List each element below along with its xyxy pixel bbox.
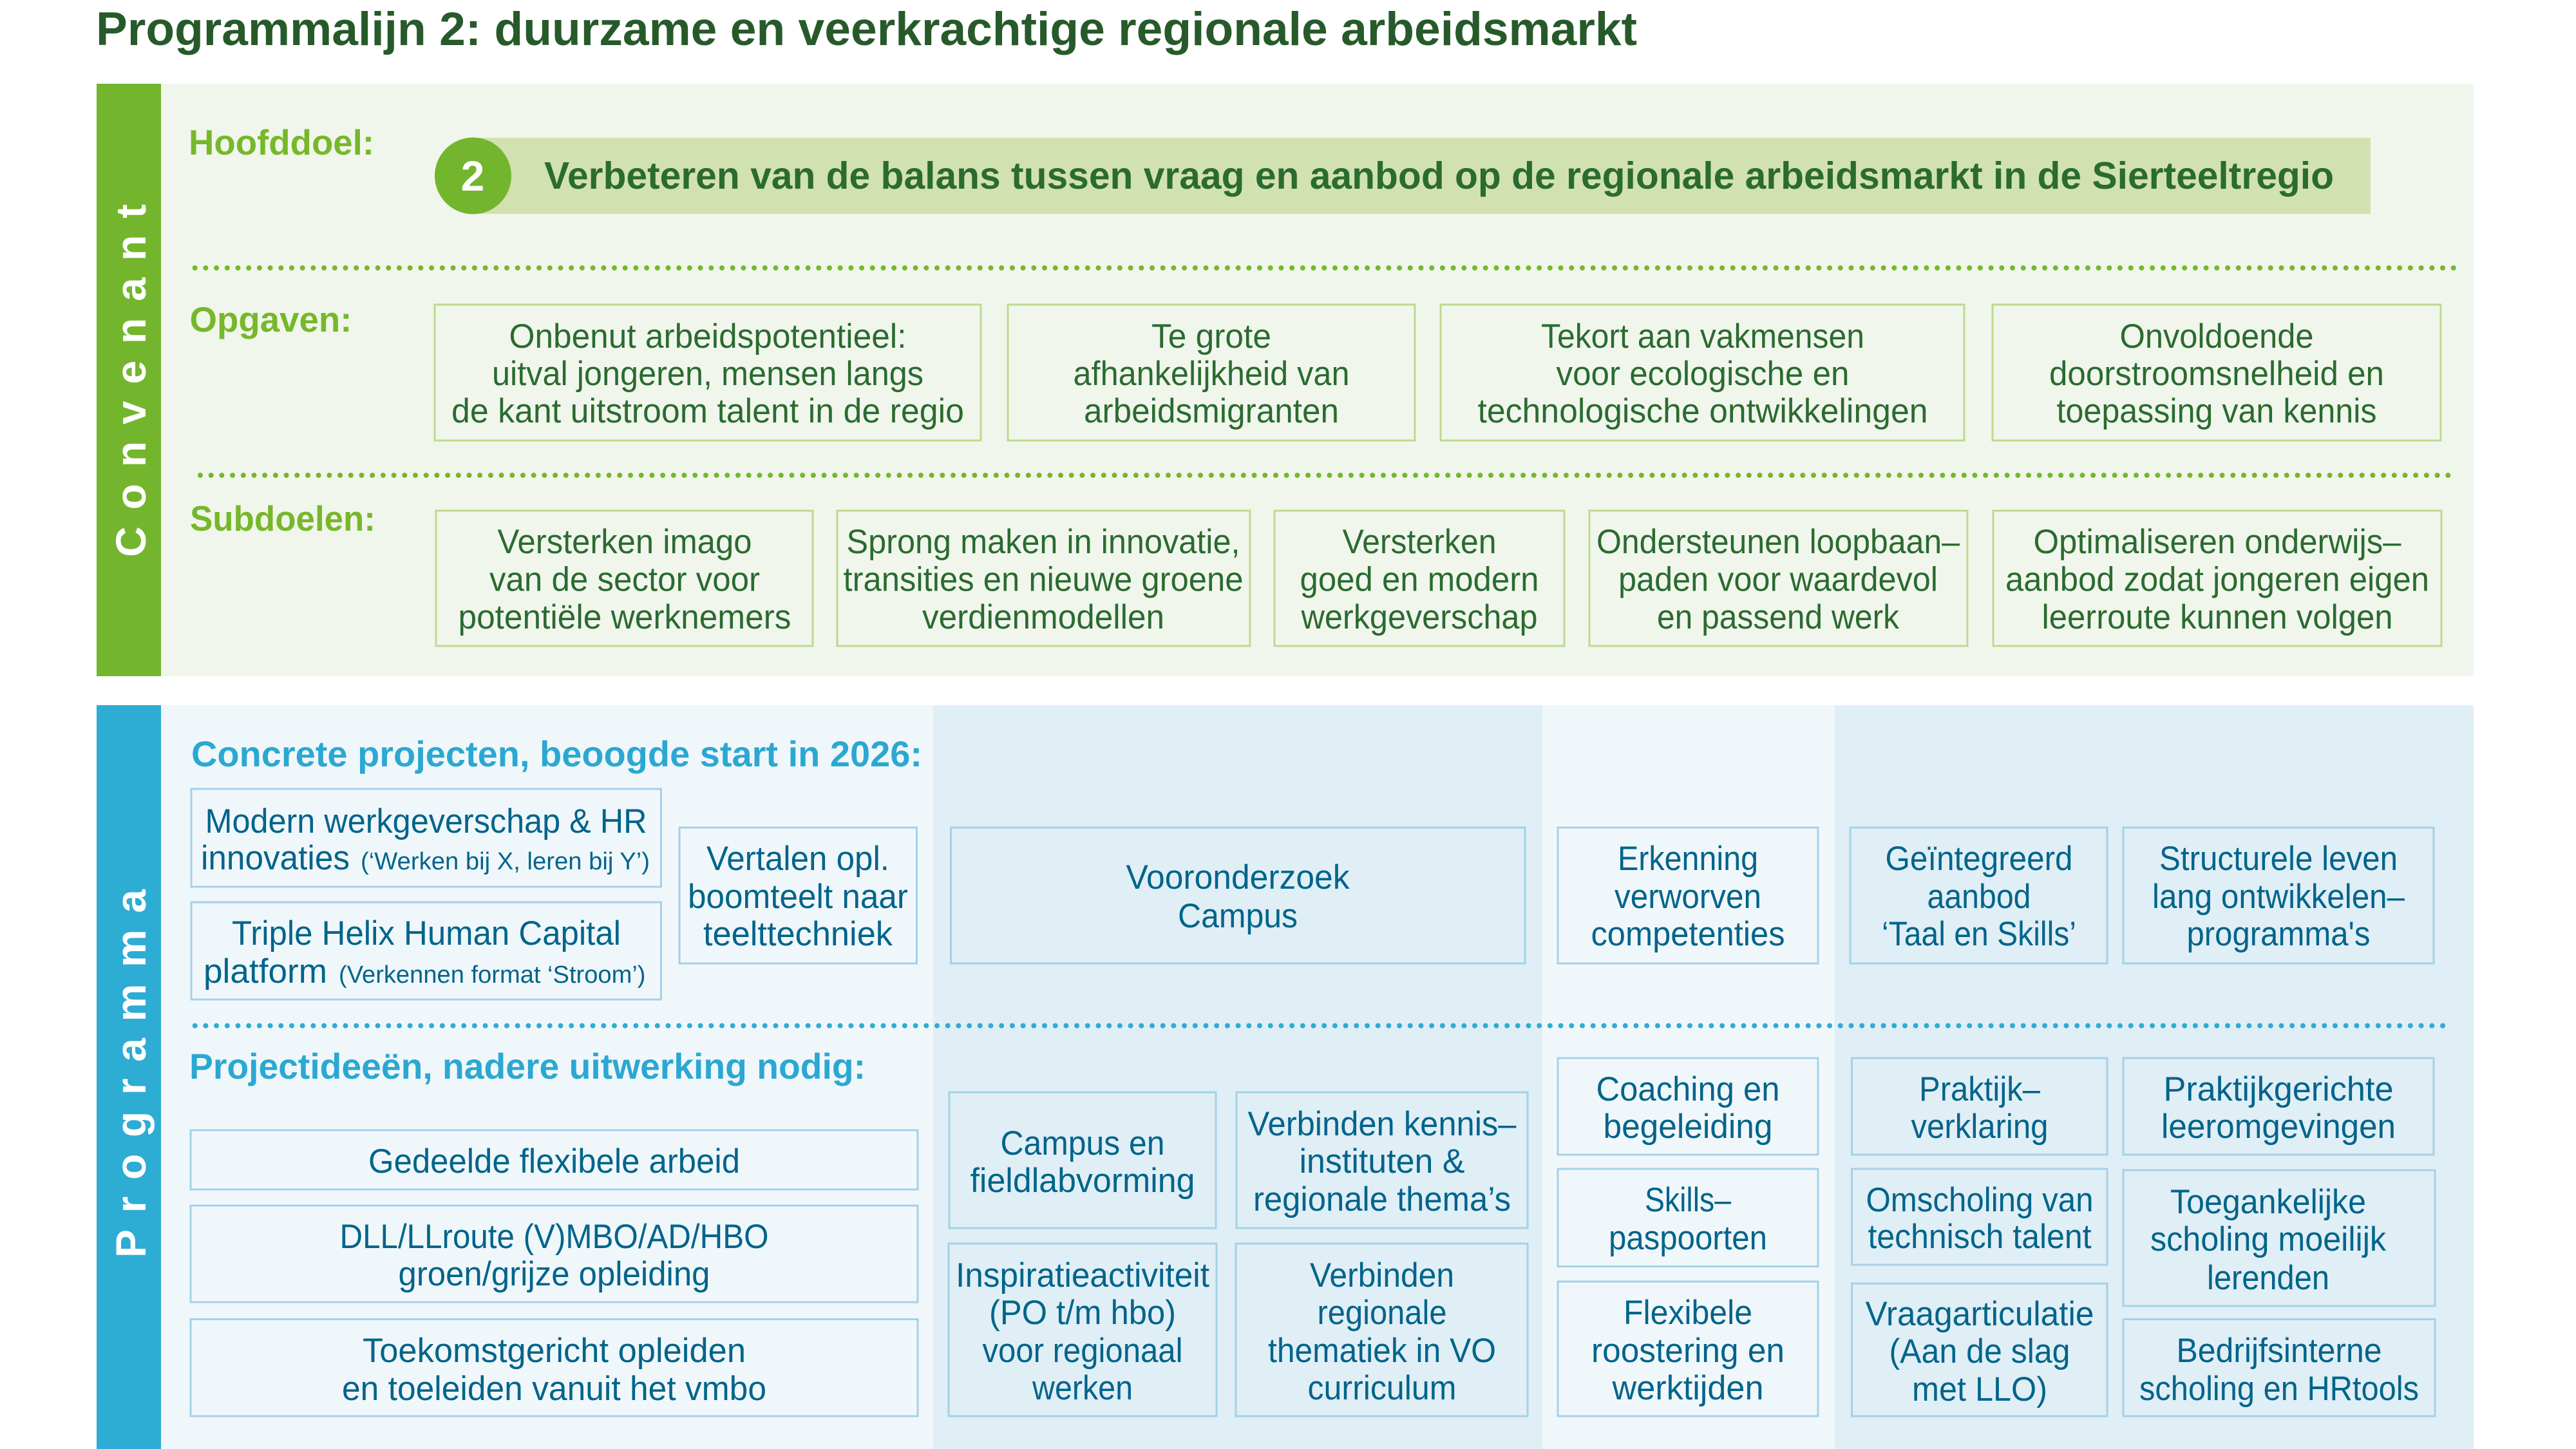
project: modern werkgeverschap: (‘Werken bij X, leren bij Y’) bbox=[361, 848, 650, 875]
project: leven lang ontwikkelen: Structurele leven bbox=[2159, 840, 2398, 878]
project: erkenning competenties: Erkenning bbox=[1618, 840, 1758, 878]
subdoel box 1: van de sector voor bbox=[489, 560, 760, 599]
idea: verbinden regionale thematiek: Verbinden bbox=[1310, 1256, 1454, 1294]
opgave box 4: toepassing van kennis bbox=[2057, 392, 2376, 430]
label: Subdoelen: Subdoelen: bbox=[190, 498, 375, 538]
project: erkenning competenties bbox=[1558, 828, 1818, 963]
idea: praktijkverklaring bbox=[1852, 1058, 2107, 1155]
project: vertalen opleiding bbox=[679, 828, 917, 963]
idea: toegankelijke scholing bbox=[2123, 1170, 2435, 1306]
project: leven lang ontwikkelen: programma's bbox=[2187, 915, 2370, 953]
idea: toegankelijke scholing: lerenden bbox=[2207, 1259, 2329, 1297]
panel: Convenant bbox=[97, 84, 2474, 676]
project: triple helix: (Verkennen format ‘Stroom’) bbox=[339, 961, 645, 989]
opgave box 2: afhankelijkheid van bbox=[1073, 355, 1350, 393]
idea: verbinden kennisinstituten bbox=[1236, 1092, 1528, 1228]
project: vertalen opleiding: Vertalen opl. bbox=[706, 840, 889, 878]
project: erkenning competenties: verworven bbox=[1615, 878, 1761, 916]
idea: verbinden kennisinstituten: regionale thema’s bbox=[1253, 1180, 1511, 1218]
heading: concrete projecten: Concrete projecten, beoogde start in 2026: bbox=[191, 734, 922, 774]
subdoel box 5 bbox=[1993, 511, 2441, 646]
opgave box 2: arbeidsmigranten bbox=[1084, 392, 1339, 430]
main goal banner: 2 bbox=[461, 152, 484, 200]
idea: verbinden regionale thematiek bbox=[1236, 1244, 1528, 1416]
idea: omscholing technisch talent bbox=[1852, 1169, 2107, 1265]
subdoel box 2: verdienmodellen bbox=[922, 598, 1164, 636]
project: taal en skills: aanbod bbox=[1927, 878, 2031, 916]
project: vertalen opleiding: boomteelt naar bbox=[688, 878, 908, 916]
idea: verbinden regionale thematiek: regionale bbox=[1318, 1294, 1446, 1332]
subdoel box 3 bbox=[1274, 511, 1564, 646]
project: vertalen opleiding: teelttechniek bbox=[703, 915, 893, 953]
project: erkenning competenties: competenties bbox=[1591, 915, 1785, 953]
idea: bedrijfsinterne scholing bbox=[2123, 1319, 2435, 1416]
idea: verbinden kennisinstituten: instituten & bbox=[1300, 1142, 1464, 1180]
idea: flexibele roostering: werktijden bbox=[1612, 1369, 1763, 1407]
idea: vraagarticulatie: met LLO) bbox=[1912, 1370, 2047, 1408]
opgave box 1: uitval jongeren, mensen langs bbox=[492, 355, 923, 393]
subdoel box 5: Optimaliseren onderwijs– bbox=[2034, 523, 2401, 561]
idea: flexibele roostering bbox=[1558, 1282, 1818, 1416]
idea: bedrijfsinterne scholing: Bedrijfsinterne bbox=[2177, 1332, 2382, 1370]
idea: gedeelde flexibele arbeid: Gedeelde flexibele arbeid bbox=[368, 1142, 740, 1180]
idea: flexibele roostering: roostering en bbox=[1591, 1332, 1785, 1370]
idea: omscholing technisch talent: Omscholing van bbox=[1866, 1181, 2093, 1219]
project: modern werkgeverschap: Modern werkgeverschap & HR bbox=[205, 802, 647, 840]
opgave box 2: Te grote bbox=[1151, 317, 1271, 355]
subdoel box 3: werkgeverschap bbox=[1301, 598, 1538, 636]
side bar: Programma bbox=[97, 705, 161, 1449]
opgave box 1: de kant uitstroom talent in de regio bbox=[451, 392, 964, 430]
subdoel box 3: Versterken bbox=[1342, 523, 1497, 561]
project: vooronderzoek campus bbox=[951, 828, 1525, 963]
idea: coaching en begeleiding: Coaching en bbox=[1596, 1070, 1780, 1108]
idea: campus en fieldlabvorming bbox=[949, 1092, 1216, 1228]
project: leven lang ontwikkelen: lang ontwikkelen– bbox=[2152, 878, 2405, 916]
opgave box 3: technologische ontwikkelingen bbox=[1477, 392, 1928, 430]
project: taal en skills: ‘Taal en Skills’ bbox=[1882, 915, 2076, 953]
project: taal en skills bbox=[1850, 828, 2107, 963]
subdoel box 1 bbox=[436, 511, 813, 646]
project: modern werkgeverschap bbox=[191, 789, 661, 887]
main goal banner bbox=[435, 138, 2371, 214]
project: taal en skills: Geïntegreerd bbox=[1886, 840, 2072, 878]
project: triple helix: platform bbox=[204, 952, 327, 990]
idea: verbinden kennisinstituten: Verbinden kennis– bbox=[1248, 1105, 1517, 1143]
subdoel box 3: goed en modern bbox=[1300, 560, 1539, 599]
opgave box 1: Onbenut arbeidspotentieel: bbox=[509, 317, 907, 355]
project: triple helix: Triple Helix Human Capital bbox=[232, 914, 621, 952]
subdoel box 4: paden voor waardevol bbox=[1618, 560, 1938, 599]
subdoel box 5: aanbod zodat jongeren eigen bbox=[2005, 560, 2429, 599]
project: triple helix bbox=[191, 902, 661, 999]
opgave box 3 bbox=[1441, 305, 1964, 440]
idea: campus en fieldlabvorming: Campus en bbox=[1001, 1124, 1164, 1162]
idea: coaching en begeleiding: begeleiding bbox=[1604, 1108, 1772, 1146]
subdoel box 2: Sprong maken in innovatie, bbox=[846, 523, 1240, 561]
project: leven lang ontwikkelen bbox=[2123, 828, 2434, 963]
idea: vraagarticulatie: (Aan de slag bbox=[1889, 1332, 2070, 1370]
idea: inspiratieactiviteit bbox=[949, 1244, 1217, 1416]
idea: toekomstgericht opleiden: en toeleiden vanuit het vmbo bbox=[342, 1370, 766, 1408]
idea: toekomstgericht opleiden: Toekomstgericht opleiden bbox=[363, 1332, 746, 1370]
side bar: Convenant: Convenant bbox=[107, 204, 155, 557]
idea: verbinden regionale thematiek: thematiek in VO bbox=[1268, 1332, 1496, 1370]
opgave box 4 bbox=[1993, 305, 2441, 440]
opgave box 3: voor ecologische en bbox=[1556, 355, 1850, 393]
side bar: Programma: Programma bbox=[107, 889, 155, 1258]
opgave box 3: Tekort aan vakmensen bbox=[1541, 317, 1864, 355]
idea: flexibele roostering: Flexibele bbox=[1624, 1294, 1752, 1332]
side bar: Convenant bbox=[97, 84, 161, 676]
idea: DLL route: groen/grijze opleiding bbox=[398, 1255, 710, 1293]
idea: verbinden regionale thematiek: curriculum bbox=[1307, 1369, 1457, 1407]
subdoel box 1: Versterken imago bbox=[497, 523, 752, 561]
idea: praktijkgerichte leeromgevingen: leeromgevingen bbox=[2161, 1108, 2396, 1146]
idea: toegankelijke scholing: Toegankelijke bbox=[2170, 1183, 2366, 1221]
idea: toegankelijke scholing: scholing moeilijk bbox=[2150, 1220, 2386, 1258]
main goal banner: Verbeteren van de balans tussen vraag en aanbod op de regionale arbeidsmarkt in de Sierteeltregio bbox=[544, 155, 2334, 197]
opgave box 4: Onvoldoende bbox=[2120, 317, 2313, 355]
idea: vraagarticulatie: Vraagarticulatie bbox=[1865, 1295, 2094, 1333]
idea: skills-paspoorten: Skills– bbox=[1645, 1181, 1731, 1219]
panel: Programma bbox=[97, 705, 2474, 1449]
subdoel box 5: leerroute kunnen volgen bbox=[2041, 598, 2393, 636]
subdoel box 1: potentiële werknemers bbox=[459, 598, 791, 636]
label: Opgaven: Opgaven: bbox=[189, 299, 352, 339]
idea: praktijkgerichte leeromgevingen: Praktijkgerichte bbox=[2164, 1070, 2393, 1108]
idea: campus en fieldlabvorming: fieldlabvorming bbox=[970, 1162, 1195, 1200]
idea: inspiratieactiviteit: voor regionaal bbox=[983, 1332, 1182, 1370]
idea: skills-paspoorten: paspoorten bbox=[1609, 1219, 1767, 1257]
opgave box 4: doorstroomsnelheid en bbox=[2049, 355, 2384, 393]
heading: projectideeën: Projectideeën, nadere uitwerking nodig: bbox=[189, 1046, 866, 1086]
idea: skills-paspoorten bbox=[1558, 1169, 1818, 1266]
idea: DLL route: DLL/LLroute (V)MBO/AD/HBO bbox=[340, 1218, 769, 1256]
idea: inspiratieactiviteit: werken bbox=[1032, 1369, 1133, 1407]
idea: praktijkverklaring: Praktijk– bbox=[1919, 1070, 2040, 1108]
label: Hoofddoel: Hoofddoel: bbox=[189, 122, 374, 162]
project: vooronderzoek campus: Vooronderzoek bbox=[1126, 858, 1350, 896]
subdoel box 4 bbox=[1589, 511, 1967, 646]
title: Programmalijn 2: duurzame en veerkrachtige regionale arbeidsmarkt bbox=[96, 3, 1637, 55]
project: modern werkgeverschap: innovaties bbox=[201, 839, 350, 877]
idea: bedrijfsinterne scholing: scholing en HRtools bbox=[2139, 1370, 2419, 1408]
idea: praktijkgerichte leeromgevingen bbox=[2123, 1058, 2434, 1155]
subdoel box 4: en passend werk bbox=[1657, 598, 1899, 636]
idea: omscholing technisch talent: technisch talent bbox=[1868, 1218, 2092, 1256]
project: vooronderzoek campus: Campus bbox=[1178, 897, 1298, 935]
subdoel box 2 bbox=[837, 511, 1250, 646]
subdoel box 4: Ondersteunen loopbaan– bbox=[1596, 523, 1960, 561]
idea: praktijkverklaring: verklaring bbox=[1911, 1108, 2048, 1146]
idea: coaching en begeleiding bbox=[1558, 1058, 1818, 1155]
opgave box 2 bbox=[1008, 305, 1415, 440]
idea: inspiratieactiviteit: (PO t/m hbo) bbox=[989, 1294, 1176, 1332]
idea: gedeelde flexibele arbeid bbox=[191, 1130, 918, 1189]
idea: toekomstgericht opleiden bbox=[191, 1319, 918, 1416]
opgave box 1 bbox=[435, 305, 981, 440]
idea: vraagarticulatie bbox=[1852, 1283, 2107, 1416]
subdoel box 2: transities en nieuwe groene bbox=[844, 560, 1243, 599]
idea: DLL route bbox=[191, 1206, 918, 1302]
idea: inspiratieactiviteit: Inspiratieactiviteit bbox=[956, 1256, 1209, 1294]
